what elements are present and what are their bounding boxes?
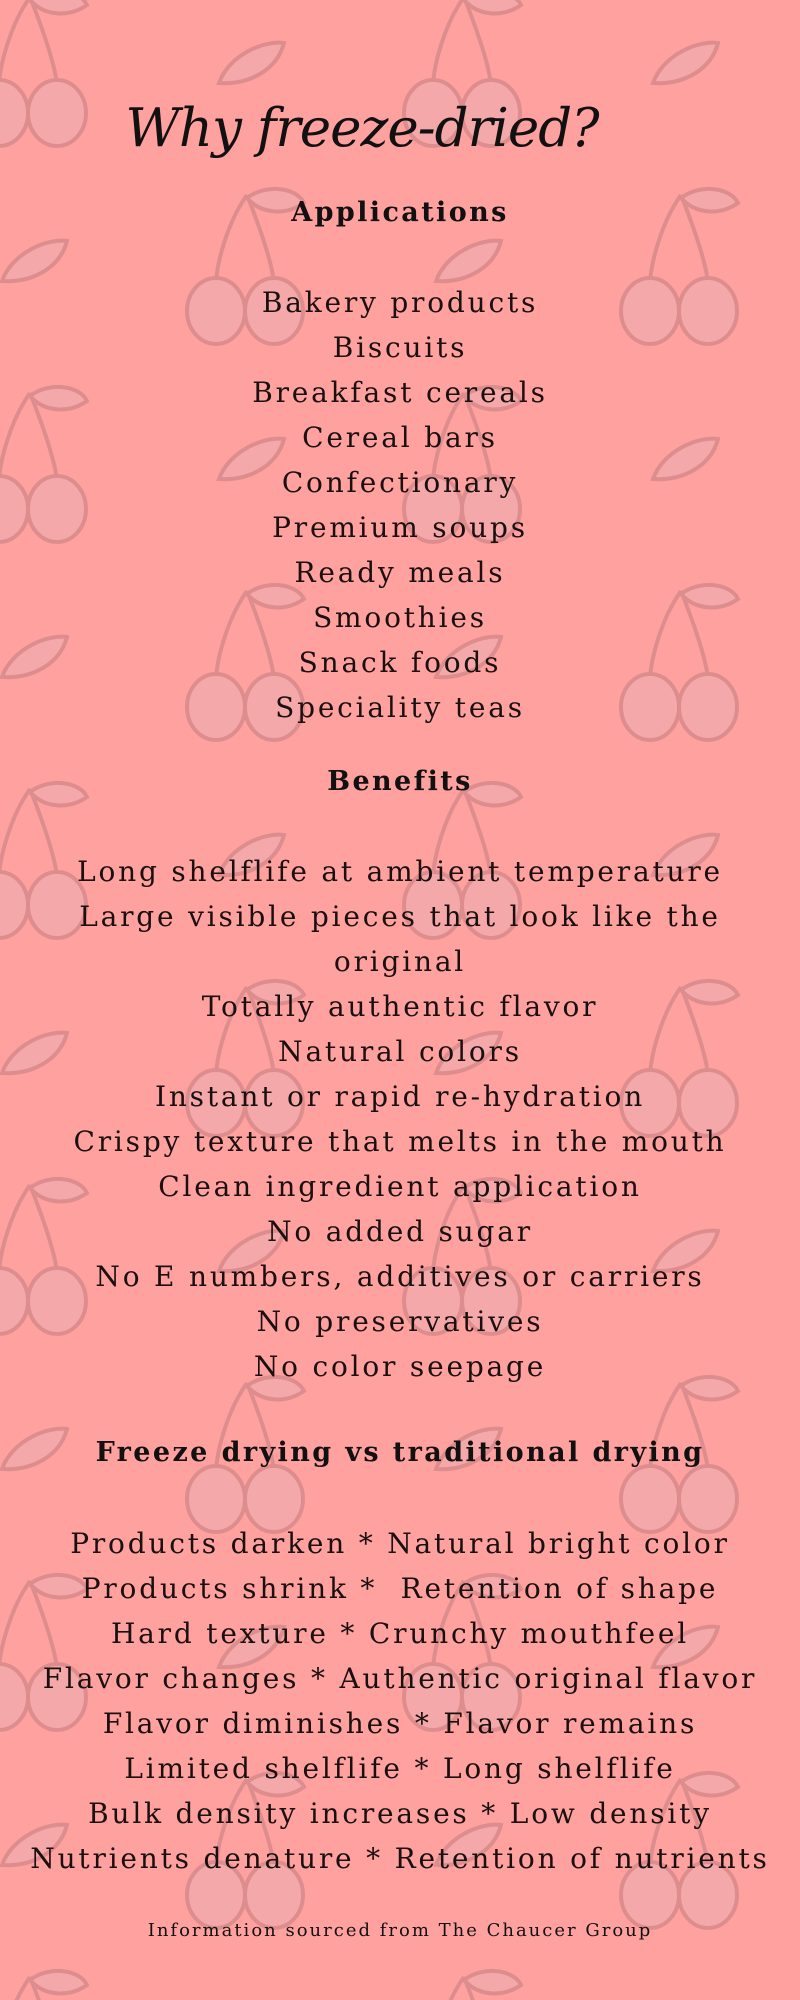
list: applications: Biscuits <box>333 331 467 364</box>
title: Why freeze-dried? <box>125 98 599 159</box>
list: applications <box>252 286 548 724</box>
list: benefits: Long shelflife at ambient temperature <box>77 855 723 888</box>
heading: benefits: Benefits <box>327 766 473 797</box>
list: comparison: Products shrink * Retention of shape <box>82 1572 718 1605</box>
list: benefits: original <box>334 945 466 978</box>
list: comparison: Flavor changes * Authentic original flavor <box>43 1662 757 1695</box>
list: applications: Smoothies <box>313 601 487 634</box>
heading: comparison: Freeze drying vs traditional drying <box>96 1437 704 1468</box>
list: comparison: Products darken * Natural bright color <box>70 1527 730 1560</box>
list: benefits: Large visible pieces that look like the <box>79 900 721 933</box>
footer: source: Information sourced from The Chaucer Group <box>148 1920 652 1941</box>
list: applications: Speciality teas <box>275 691 525 724</box>
list: benefits: Clean ingredient application <box>158 1170 642 1203</box>
list: comparison <box>30 1527 770 1875</box>
list: benefits <box>73 855 727 1383</box>
list: benefits: Natural colors <box>278 1035 522 1068</box>
list: comparison: Bulk density increases * Low density <box>88 1797 712 1830</box>
list: benefits: No added sugar <box>267 1215 533 1248</box>
list: benefits: Crispy texture that melts in the mouth <box>73 1125 727 1158</box>
heading: applications: Applications <box>291 197 509 228</box>
list: benefits: No E numbers, additives or carriers <box>95 1260 705 1293</box>
list: applications: Ready meals <box>295 556 505 589</box>
list: applications: Breakfast cereals <box>252 376 548 409</box>
list: comparison: Limited shelflife * Long shelflife <box>124 1752 676 1785</box>
list: comparison: Hard texture * Crunchy mouthfeel <box>111 1617 689 1650</box>
list: applications: Cereal bars <box>302 421 498 454</box>
list: benefits: No preservatives <box>257 1305 543 1338</box>
list: applications: Confectionary <box>282 466 518 499</box>
list: benefits: No color seepage <box>254 1350 546 1383</box>
list: applications: Premium soups <box>272 511 528 544</box>
list: comparison: Nutrients denature * Retention of nutrients <box>30 1842 770 1875</box>
list: benefits: Totally authentic flavor <box>202 990 598 1023</box>
list: comparison: Flavor diminishes * Flavor remains <box>103 1707 697 1740</box>
list: applications: Snack foods <box>299 646 501 679</box>
list: benefits: Instant or rapid re-hydration <box>155 1080 645 1113</box>
list: applications: Bakery products <box>262 286 538 319</box>
